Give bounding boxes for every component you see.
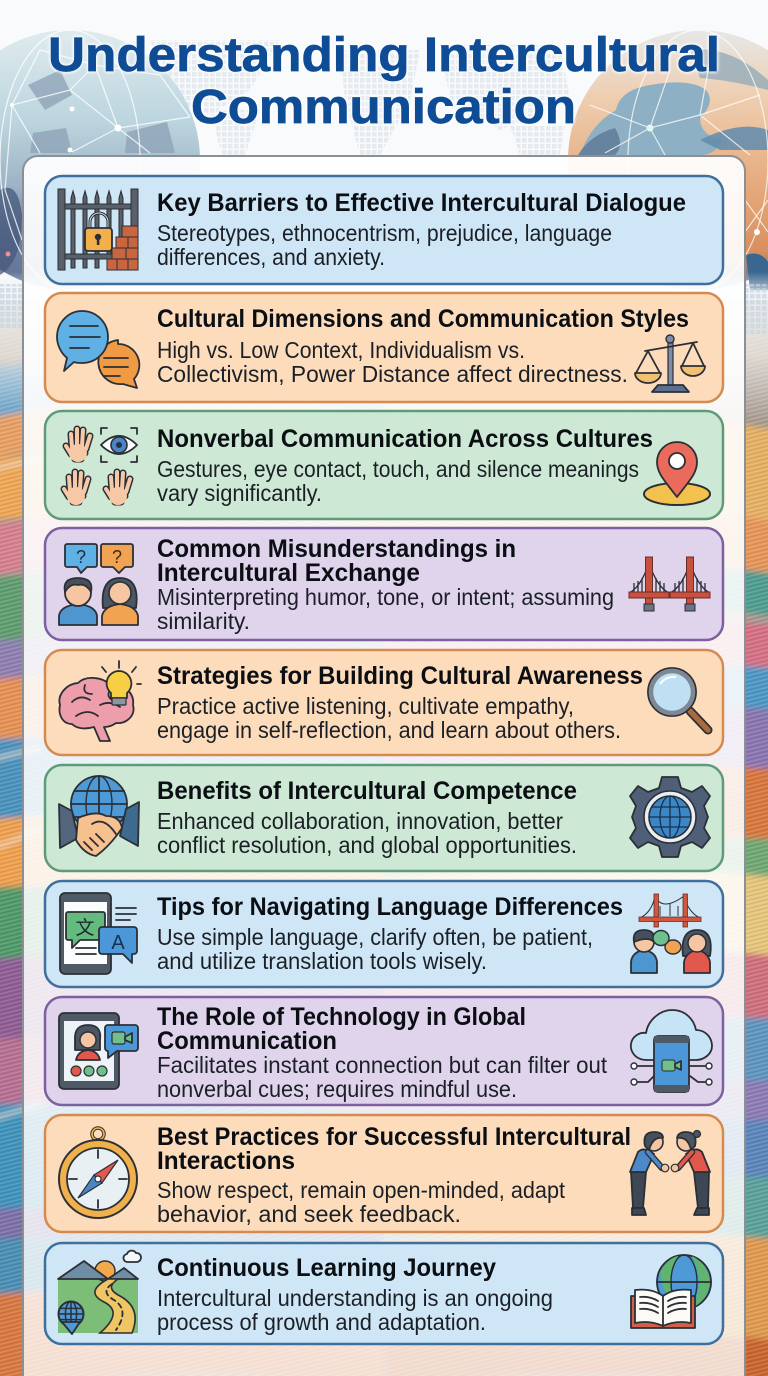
card 5: strategies: Strategies for Building Cultural Awareness: [157, 662, 643, 690]
icon: location pin: [644, 442, 710, 505]
card 10: continuous learning: Intercultural understanding is an ongoing: [157, 1285, 553, 1311]
card 4: misunderstandings: Misinterpreting humor, tone, or intent; assuming: [157, 584, 614, 610]
card 7: language tips: and utilize translation tools wisely.: [157, 948, 487, 974]
icon: globe over handshake: [59, 776, 139, 856]
card 8: technology: The Role of Technology in Global: [157, 1003, 526, 1031]
card 2: cultural dimensions: High vs. Low Context, Individualism vs.: [157, 337, 525, 363]
card 6: benefits: Enhanced collaboration, innovation, better: [157, 808, 563, 834]
card 8: technology: [45, 997, 723, 1105]
card 7: language tips: Tips for Navigating Language Differences: [157, 893, 623, 921]
card 7: language tips: Use simple language, clarify often, be patient,: [157, 924, 593, 950]
icon: globe and open book: [631, 1255, 711, 1328]
icon: magnifying glass: [648, 668, 708, 730]
card 5: strategies: Practice active listening, cultivate empathy,: [157, 693, 574, 719]
card 8: technology: Communication: [157, 1027, 337, 1055]
icon: gear with globe: [630, 777, 710, 857]
card 1: key barriers: Key Barriers to Effective Intercultural Dialogue: [157, 189, 686, 217]
card 10: continuous learning: [45, 1243, 723, 1344]
card 4: misunderstandings: Common Misunderstandings in: [157, 535, 516, 563]
card 3: nonverbal: [45, 411, 723, 519]
icon: two people with question bubbles: [59, 544, 138, 625]
icon: brain and lightbulb: [59, 661, 141, 741]
card 1: key barriers: differences, and anxiety.: [157, 244, 385, 270]
icon: speech bubbles: [57, 311, 139, 388]
card 9: best practices: Interactions: [157, 1147, 295, 1175]
card 5: strategies: engage in self-reflection, and learn about others.: [157, 717, 621, 743]
card 6: benefits: [45, 765, 723, 871]
card 8: technology: Facilitates instant connection but can filter out: [157, 1052, 608, 1078]
card 5: strategies: [45, 650, 723, 755]
title: [48, 29, 720, 134]
card 6: benefits: conflict resolution, and global opportunities.: [157, 832, 577, 858]
card 3: nonverbal: Nonverbal Communication Across Cultures: [157, 425, 653, 453]
card 9: best practices: Best Practices for Successful Intercultural: [157, 1123, 631, 1151]
card 9: best practices: [45, 1115, 723, 1232]
icon: translation phone: [60, 893, 137, 974]
title: Communication: [191, 81, 576, 134]
icon: balance scales: [635, 335, 705, 392]
icon: compass: [59, 1128, 137, 1218]
card 1: key barriers: [45, 176, 723, 284]
icon: two people bowing: [630, 1130, 710, 1215]
world map dots: [150, 40, 570, 155]
card 2: cultural dimensions: [45, 293, 723, 402]
icon: two people with question bubbles: ?: [112, 547, 122, 567]
card 6: benefits: Benefits of Intercultural Competence: [157, 777, 577, 805]
right globe: [568, 30, 768, 290]
card 1: key barriers: Stereotypes, ethnocentrism, prejudice, language: [157, 220, 612, 246]
icon: two people with question bubbles: ?: [76, 547, 86, 567]
card 9: best practices: Show respect, remain open-minded, adapt: [157, 1177, 566, 1203]
card 4: misunderstandings: similarity.: [157, 608, 250, 634]
card 3: nonverbal: vary significantly.: [157, 480, 322, 506]
left globe: [0, 30, 200, 290]
card 4: misunderstandings: Intercultural Exchange: [157, 559, 420, 587]
card 10: continuous learning: Continuous Learning Journey: [157, 1254, 496, 1282]
card 7: language tips: [45, 881, 723, 987]
card 3: nonverbal: Gestures, eye contact, touch, and silence meanings: [157, 456, 639, 482]
icon: translation phone: A: [111, 932, 125, 954]
yarn background left: [0, 300, 400, 1376]
card 4: misunderstandings: [45, 528, 723, 640]
card 2: cultural dimensions: Cultural Dimensions and Communication Styles: [157, 305, 689, 333]
title: Understanding Intercultural: [48, 29, 720, 82]
icon: two bridges: [629, 557, 710, 611]
icon: translation phone: 文: [75, 917, 95, 939]
icon: locked gate and brick wall: [58, 189, 138, 270]
icon: cloud, phone and circuits: [631, 1010, 712, 1092]
icon: bridge and people talking: [631, 894, 711, 973]
card 9: best practices: behavior, and seek feedback.: [157, 1201, 461, 1227]
icon: winding road landscape: [58, 1251, 141, 1334]
icon: hand gestures and eye: [64, 428, 137, 505]
icon: tablet video call: [59, 1013, 138, 1089]
card 8: technology: nonverbal cues; requires mindful use.: [157, 1076, 517, 1102]
card 10: continuous learning: process of growth and adaptation.: [157, 1309, 486, 1335]
card 2: cultural dimensions: Collectivism, Power Distance affect directness.: [157, 361, 628, 387]
